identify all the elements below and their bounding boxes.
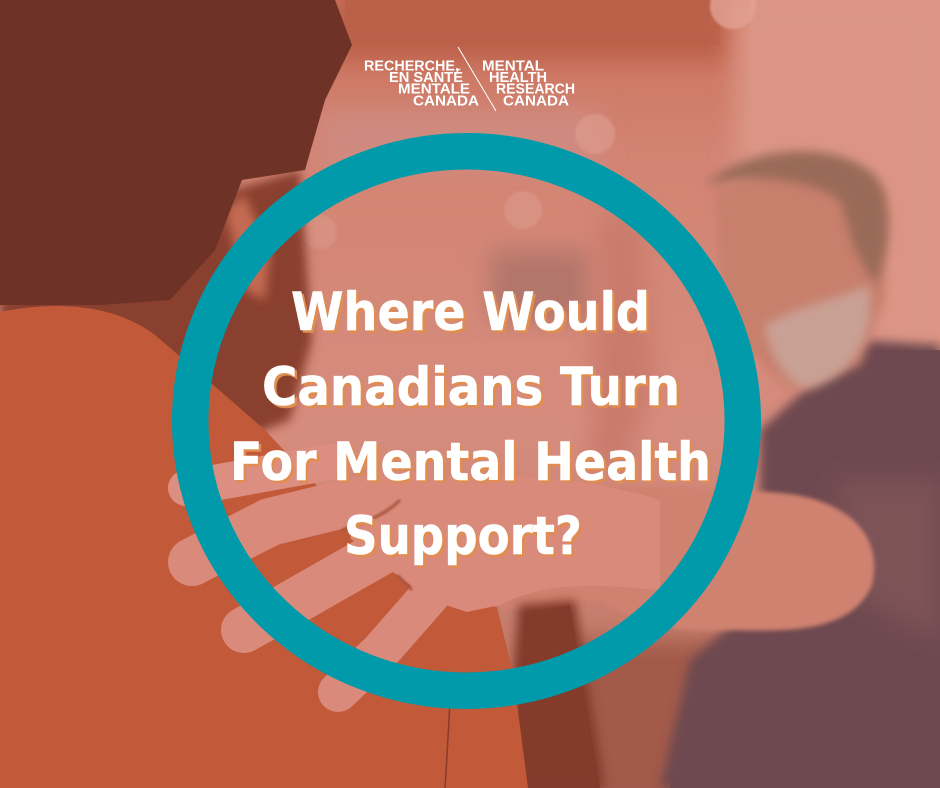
logo: English name: RESEARCH (496, 82, 575, 98)
logo: French name: MENTALE (398, 82, 470, 98)
back of hand (350, 476, 660, 612)
logo (364, 47, 575, 111)
teal circle ring (190, 151, 743, 691)
finger: second (192, 490, 400, 562)
background man: forearm reaching to shoulder (480, 486, 874, 788)
title shadow: Where Would (294, 284, 652, 346)
logo: French name: RECHERCHE, (364, 58, 459, 74)
title shadow: Canadians Turn (264, 360, 682, 420)
title lines: Canadians Turn (262, 357, 680, 418)
title lines: Support? (344, 506, 582, 567)
hand on shoulder (186, 462, 660, 692)
logo: French name (364, 58, 480, 110)
logo: divider (458, 47, 496, 111)
title lines: Where Would (291, 282, 650, 343)
title shadow: For Mental Health (232, 434, 714, 496)
logo: English name: CANADA (503, 94, 570, 110)
finger: index top (186, 462, 330, 488)
title lines: For Mental Health (230, 432, 711, 493)
logo: English name (482, 58, 575, 110)
title shadow (232, 284, 714, 570)
foreground person: orange sweater (0, 306, 528, 788)
foreground person: neck and hair (0, 0, 352, 440)
title shadow: Support? (346, 508, 584, 570)
logo: French name: CANADA (413, 94, 480, 110)
finger: little (338, 595, 430, 692)
logo: French name: EN SANTÉ (389, 69, 463, 86)
finger: third (244, 550, 385, 630)
background man: shirt, head, hair and beard (590, 151, 940, 788)
title lines (230, 282, 711, 567)
title (230, 282, 714, 570)
logo: English name: MENTAL (482, 58, 544, 74)
logo: English name: HEALTH (489, 70, 547, 86)
